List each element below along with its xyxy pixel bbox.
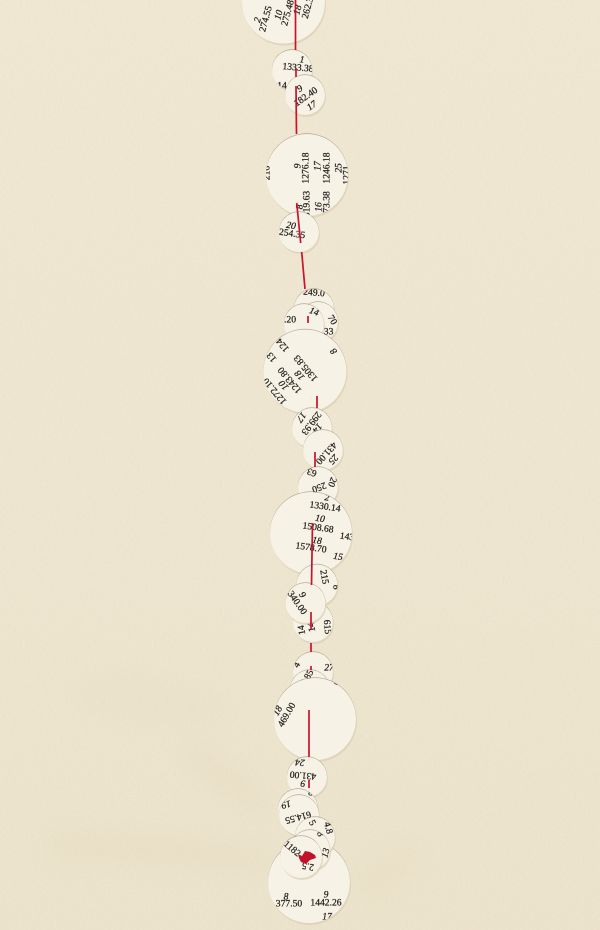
paper circle 2: 1 [299, 54, 305, 66]
paper circle 25: 8 [284, 892, 289, 902]
paper circle 25 [268, 840, 351, 925]
paper circle 3: 17 [305, 98, 320, 113]
paper circle 4: 8 [294, 204, 306, 209]
paper circle 1: 274.55 [257, 5, 275, 33]
paper circle 13: 1330.14 [309, 499, 341, 515]
paper circle 9 [261, 329, 348, 414]
paper circle 22: 614.55 [284, 808, 312, 826]
paper circle 9: 13 [265, 350, 279, 364]
paper circle 1 [242, 0, 326, 46]
paper circle 26 [280, 835, 323, 880]
paper circle 20: 24 [295, 756, 305, 768]
paper circle 10: 299.93 [299, 409, 323, 437]
paper circle 23: 5 [306, 818, 318, 828]
paper circle 25: 9 [324, 890, 329, 900]
paper circle 8: 1 33 [317, 326, 334, 338]
paper circle 4: 17 [312, 160, 324, 171]
paper circle 20: 9 [300, 777, 306, 789]
paper circle 13: 10 [314, 513, 326, 525]
paper circle 11: 25 [326, 452, 340, 466]
paper circle 25: 1442.26 [310, 898, 342, 908]
paper circle 19: 3 [332, 676, 342, 688]
paper circle 4: 1246.18 [322, 152, 332, 184]
paper circle 21: 42 [307, 786, 319, 798]
paper circle 10: 14 [310, 421, 324, 435]
paper circle 4: 9 [292, 163, 304, 168]
paper circle 3: 9 [295, 83, 305, 95]
paper circle 13: 1508.68 [302, 520, 334, 536]
paper circle 17: 4 [291, 660, 303, 670]
paper circle 7: 14 [308, 305, 321, 319]
paper circle 19: 469.00 [276, 701, 298, 729]
paper circle 26: 2.5 [301, 860, 315, 872]
paper circle 24: 8 [314, 830, 326, 838]
red thread knot [298, 851, 316, 864]
paper circle 3 [285, 74, 326, 117]
paper circle 18: 476.85 [294, 668, 316, 696]
paper circle 5: 20 [285, 220, 297, 232]
paper circle 8 [308, 301, 339, 339]
paper circle 4: 216 [262, 166, 272, 180]
paper circle 4: 1271 [342, 165, 352, 185]
paper circle 17 [293, 651, 334, 682]
paper circle 21 [278, 788, 319, 814]
paper circle 20: 431.00 [289, 768, 317, 782]
paper circle 20 [287, 756, 328, 799]
paper circle 4: 16 [314, 202, 324, 212]
paper circle 19: 18 [271, 704, 285, 718]
paper circle 12: 250 [310, 479, 328, 495]
paper circle 25: 377.50 [276, 898, 302, 910]
paper circle 9: 124 [274, 336, 292, 354]
paper circle 22: 19 [280, 797, 292, 811]
paper circle 13: 15 [332, 551, 344, 563]
paper circle 1: 18 [291, 4, 305, 16]
paper circle 12 [298, 466, 339, 500]
paper circle 22 [279, 794, 320, 837]
paper circle 4: 73.38 [322, 191, 332, 213]
paper circle 6: 249.0 [303, 287, 325, 299]
paper circle 13: 2 [324, 492, 330, 504]
paper circle 1: 10 [272, 9, 286, 21]
paper circle 24 [294, 829, 331, 871]
paper circle 19 [271, 676, 357, 762]
paper circle 16: 14 [306, 621, 318, 633]
paper circle 9: 1243.80 [276, 364, 304, 395]
paper circle 5: 254.35 [278, 227, 306, 241]
paper circle 1: 2 [252, 16, 264, 24]
paper circle 23 [295, 816, 336, 853]
paper circle 11 [303, 429, 344, 472]
paper circle 8: 70 [325, 313, 339, 327]
paper circle 9: 1305.83 [292, 352, 320, 383]
paper circle 9: 8 [328, 345, 340, 356]
paper circle 21: 4 [279, 787, 286, 799]
paper circle 4: 319.63 [302, 191, 312, 217]
paper circle 17: 27 [324, 662, 335, 674]
paper circle 4: 25 [334, 163, 344, 173]
red thread [296, 0, 317, 788]
paper circle 2: 1333.38 [282, 61, 314, 75]
paper circle 14: 215 [317, 569, 331, 585]
paper circle 26: 1182 [281, 839, 303, 859]
paper circle 13: 143 [339, 531, 355, 543]
paper circle 9: 1272.10 [261, 375, 289, 406]
paper circle 12: 20 [325, 476, 339, 489]
paper circle 18 [290, 669, 328, 686]
paper circle 3: 182.40 [292, 85, 320, 109]
paper circle 10 [292, 407, 333, 450]
paper circle 15: 340.00 [285, 589, 309, 617]
paper circle 13 [270, 491, 355, 576]
paper circle 11: 431.00 [313, 440, 339, 467]
paper circle 14: 8 [330, 584, 342, 591]
paper circle 16: 615 [321, 619, 333, 635]
paper circle 6 [294, 288, 335, 311]
paper circle 7 [284, 303, 325, 334]
paper circle 7: .20 [284, 314, 296, 326]
paper circle 16 [293, 606, 334, 644]
paper circle 4: 1276.18 [300, 152, 312, 184]
paper circle 12: 63 [305, 465, 318, 479]
paper circle 9: 10 [277, 378, 291, 392]
paper circle 13: 18 [311, 535, 323, 547]
paper circle 2: 14 [277, 80, 287, 92]
paper circle 15: 9 [296, 590, 308, 600]
paper circle 25: 17 [322, 912, 333, 922]
paper circle 15 [285, 582, 326, 625]
paper circle 24: 13 [319, 847, 333, 859]
paper circle 13: 1578.70 [295, 540, 327, 556]
paper circle 5 [278, 211, 320, 254]
paper circle 16: 14 [296, 624, 308, 636]
paper circle 14 [296, 564, 338, 606]
paper circle 10: 17 [293, 410, 308, 425]
paper circle 23: 4.8 [321, 821, 335, 835]
paper circle 2 [272, 49, 314, 92]
paper circle 9: 18 [293, 368, 307, 382]
paper circle 4 [262, 133, 352, 218]
